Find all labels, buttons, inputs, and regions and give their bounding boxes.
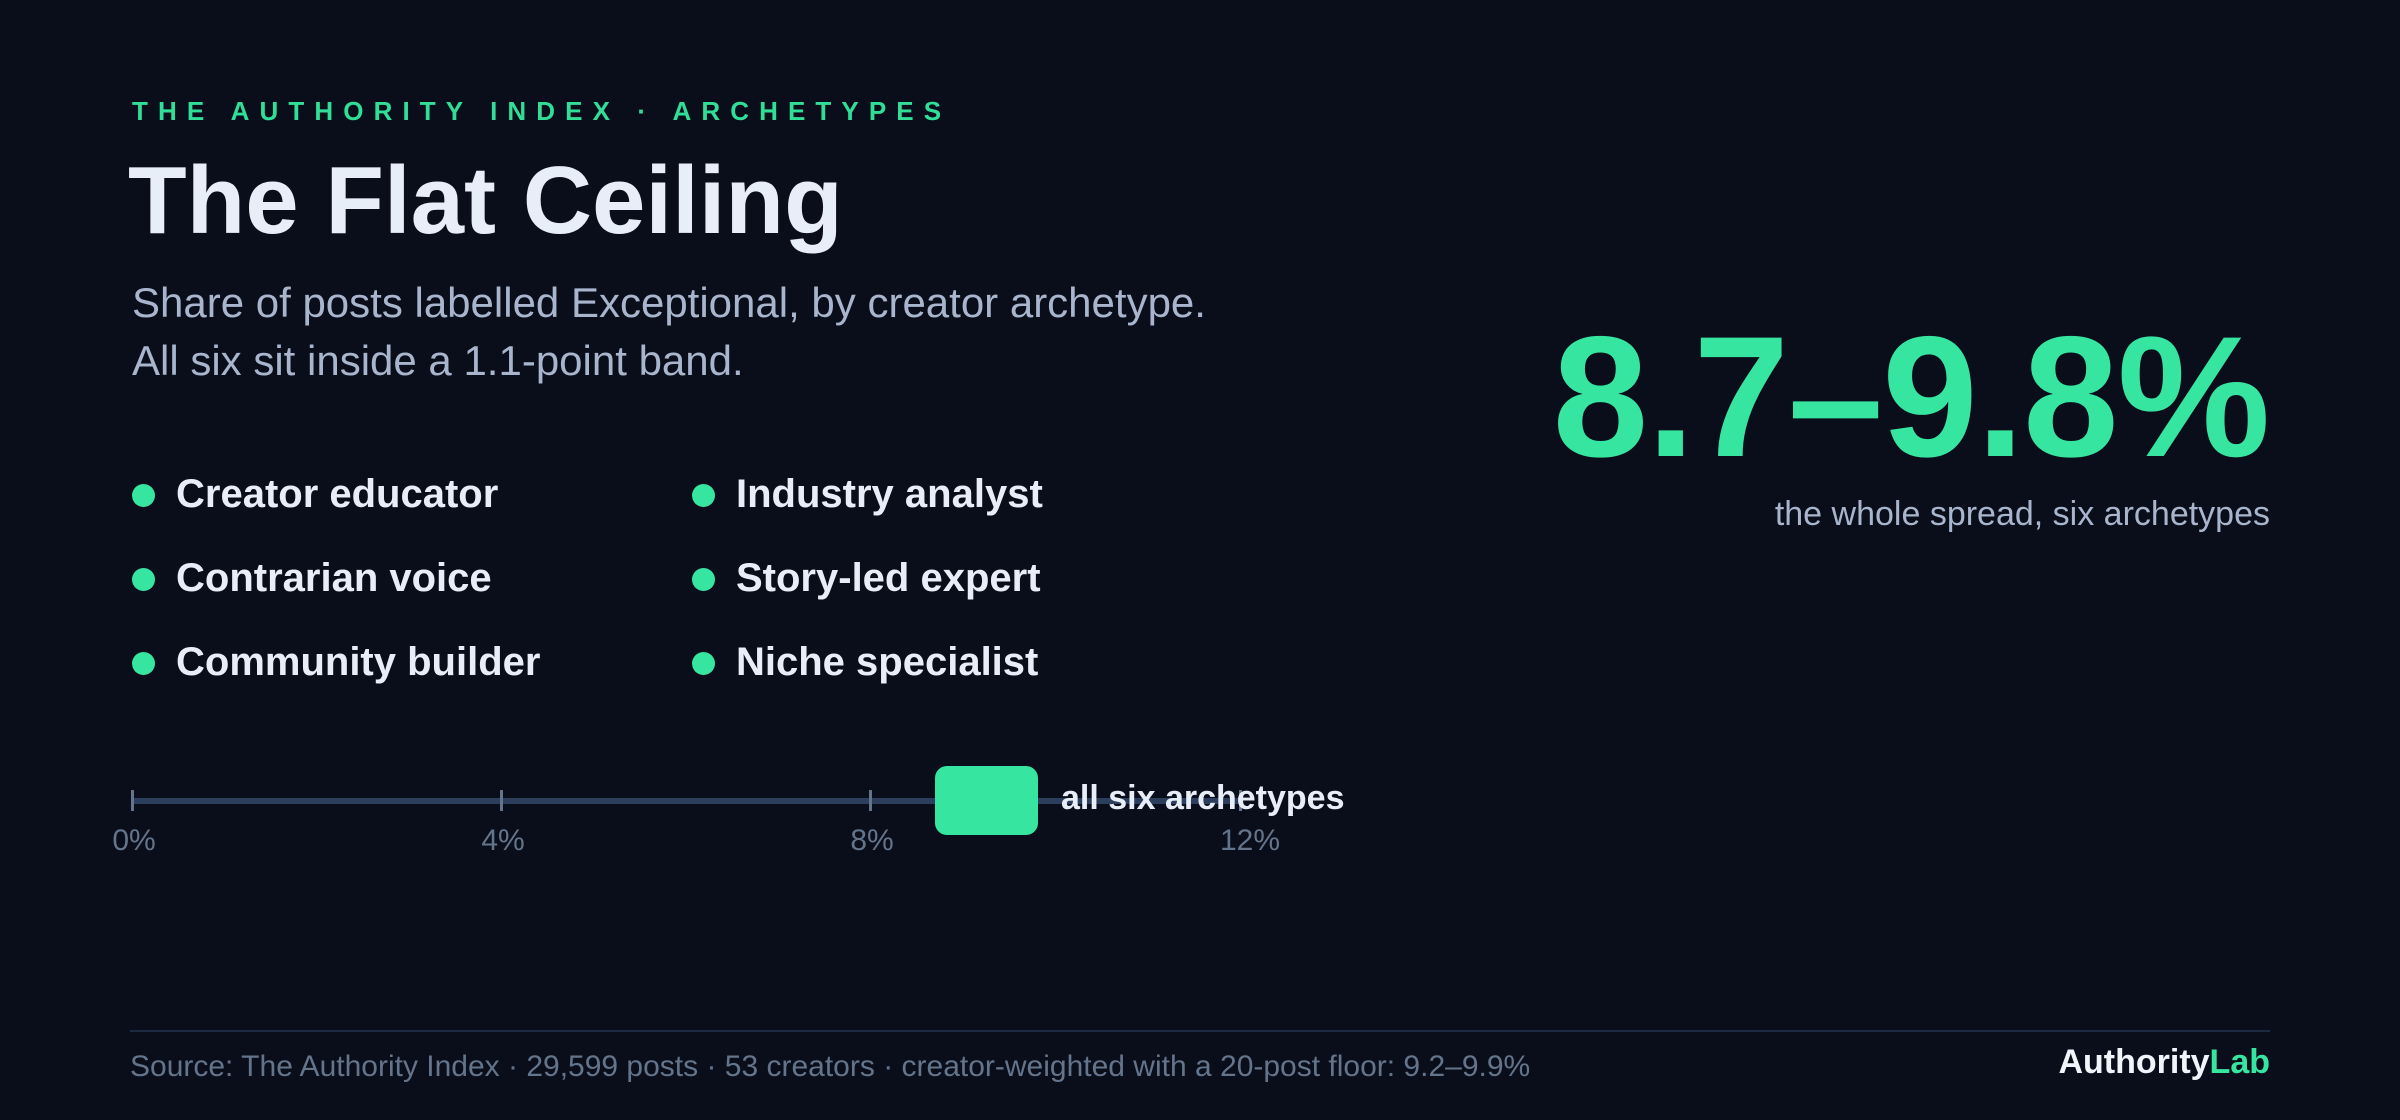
brand: AuthorityLab <box>2058 1043 2270 1081</box>
archetype list: Community builder <box>176 640 540 684</box>
subtitle: Share of posts labelled Exceptional, by creator archetype. <box>132 279 1206 326</box>
item: Community builder <box>132 640 540 684</box>
archetype list: Creator educator <box>176 472 498 516</box>
text: 4% <box>481 824 525 857</box>
big stat: 8.7–9.8% <box>1553 301 2269 493</box>
item: Niche specialist <box>692 640 1038 684</box>
eyebrow: THE AUTHORITY INDEX · ARCHETYPES <box>132 96 951 126</box>
text: 12% <box>1220 824 1280 857</box>
item: Industry analyst <box>692 472 1043 516</box>
axis ticks <box>131 790 1242 811</box>
archetype list: Niche specialist <box>736 640 1038 684</box>
archetype list: Contrarian voice <box>176 556 492 600</box>
item: Creator educator <box>132 472 498 516</box>
archetype list: Story-led expert <box>736 556 1041 600</box>
archetype list <box>132 472 1043 684</box>
text: 8% <box>850 824 894 857</box>
text: 0% <box>112 824 156 857</box>
range band label: all six archetypes <box>1061 779 1345 817</box>
source note: Source: The Authority Index · 29,599 posts · 53 creators · creator-weighted with a 20-post floor: 9.2–9.9% <box>130 1050 1530 1083</box>
title: The Flat Ceiling <box>128 147 843 254</box>
range band marker <box>935 766 1038 835</box>
axis labels <box>112 824 1280 857</box>
stat caption: the whole spread, six archetypes <box>1775 495 2270 533</box>
item: Contrarian voice <box>132 556 492 600</box>
item: Story-led expert <box>692 556 1041 600</box>
archetype list: Industry analyst <box>736 472 1043 516</box>
footer rule <box>130 1030 2270 1032</box>
subtitle: All six sit inside a 1.1-point band. <box>132 337 744 384</box>
scale axis track <box>132 798 1240 804</box>
subtitle <box>132 279 1206 384</box>
